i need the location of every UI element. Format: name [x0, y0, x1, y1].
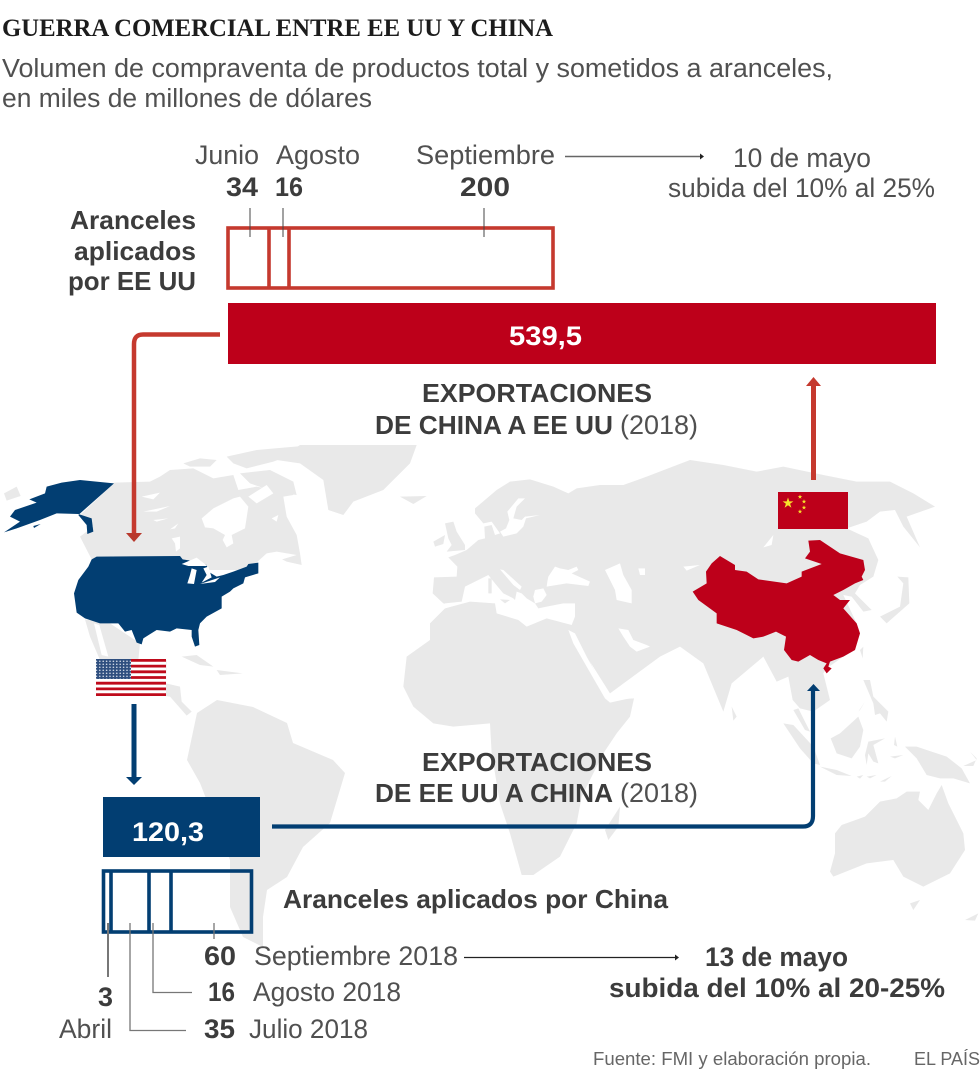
value: Julio 2018: 35 [204, 1014, 235, 1044]
callout: 10 de mayo: 10 de mayo [733, 143, 871, 173]
callout: 10 de mayo [668, 143, 935, 203]
subtitle: Volumen de compraventa de productos total y sometidos a aranceles, [2, 55, 833, 83]
value: Septiembre 2018: 60 [204, 941, 236, 971]
arrow: US exports down [126, 704, 142, 785]
world map background [4, 445, 978, 947]
value: Agosto 2018: Agosto 2018 [253, 977, 401, 1007]
map: Alaska border region, Mexico, Caribbean, Greenland [4, 445, 427, 716]
map: Eurasia, Africa and Oceania [403, 460, 978, 921]
bar: exportaciones China a EE UU: 539,5 [509, 321, 582, 351]
label: exportaciones de EE UU a China: (2018) [620, 778, 698, 808]
panel: aranceles aplicados por China [59, 871, 945, 1044]
tariff values: 200 [460, 172, 510, 202]
tariff values: 16 [275, 172, 303, 202]
callout: 10 de mayo: subida del 10% al 25% [668, 173, 935, 203]
heading: aranceles EE UU [68, 205, 196, 296]
title: GUERRA COMERCIAL ENTRE EE UU Y CHINA [2, 13, 554, 42]
arrow: to 13 de mayo [464, 954, 679, 960]
tariff values: 34 [226, 172, 258, 202]
leader lines [108, 923, 214, 1030]
bar: exportaciones EE UU a China: 120,3 [132, 817, 204, 847]
value: Julio 2018: Julio 2018 [249, 1014, 368, 1044]
value: Agosto 2018: 16 [208, 977, 235, 1007]
bar: exportaciones China a EE UU [228, 303, 936, 364]
arrow: China up to bar [806, 377, 821, 480]
callout: 13 de mayo [609, 942, 945, 1003]
heading: aranceles EE UU: Aranceles [70, 205, 196, 235]
map: South America [187, 700, 345, 947]
tariff values [226, 172, 510, 202]
map: Canada and Arctic islands [100, 445, 313, 570]
month labels: Agosto [276, 140, 360, 170]
value: Abril [59, 982, 113, 1044]
month labels: Junio [195, 140, 259, 170]
icon: US flag [96, 659, 166, 696]
heading: aranceles China: Aranceles aplicados por China [283, 884, 669, 914]
bar: exportaciones EE UU a China [103, 797, 260, 857]
value: Septiembre 2018: Septiembre 2018 [254, 941, 458, 971]
month labels [195, 140, 555, 170]
stacked tariff box [104, 871, 252, 932]
map: United States highlighted [4, 480, 258, 647]
heading: aranceles EE UU: por EE UU [68, 266, 196, 296]
arrow: China exports to US [126, 334, 220, 542]
icon: China flag [778, 492, 848, 529]
value: Abril: 3 [98, 982, 113, 1012]
month labels: Septiembre [416, 140, 555, 170]
arrow: US exports to China [272, 684, 820, 826]
subtitle: en miles de millones de dólares [2, 85, 372, 113]
stacked tariff box [228, 228, 553, 288]
map: Southeast Asia islands [783, 680, 977, 783]
value: Abril: Abril [59, 1014, 112, 1044]
label: exportaciones de EE UU a China: EXPORTACIONES [422, 747, 652, 777]
callout: 13 de mayo: 13 de mayo [705, 942, 848, 972]
label: exportaciones de China a EE UU [375, 378, 698, 440]
label: exportaciones de EE UU a China: DE EE UU A CHINA [375, 778, 613, 808]
callout: 13 de mayo: subida del 10% al 20-25% [609, 973, 945, 1003]
seas cut out of the land [445, 575, 575, 627]
subtitle [2, 55, 833, 113]
label: exportaciones de EE UU a China [375, 747, 698, 808]
panel: aranceles aplicados por EE UU [68, 140, 935, 296]
credit: EL PAÍS [914, 1048, 980, 1069]
label: exportaciones de China a EE UU: (2018) [620, 410, 698, 440]
heading: aranceles EE UU: aplicados [74, 236, 196, 266]
arrow: to 10 de mayo [565, 154, 704, 160]
label: exportaciones de China a EE UU: DE CHINA A EE UU [375, 410, 613, 440]
map: China highlighted [693, 540, 865, 673]
label: exportaciones de China a EE UU: EXPORTACIONES [422, 378, 652, 408]
source note: Fuente: FMI y elaboración propia. [593, 1048, 871, 1069]
